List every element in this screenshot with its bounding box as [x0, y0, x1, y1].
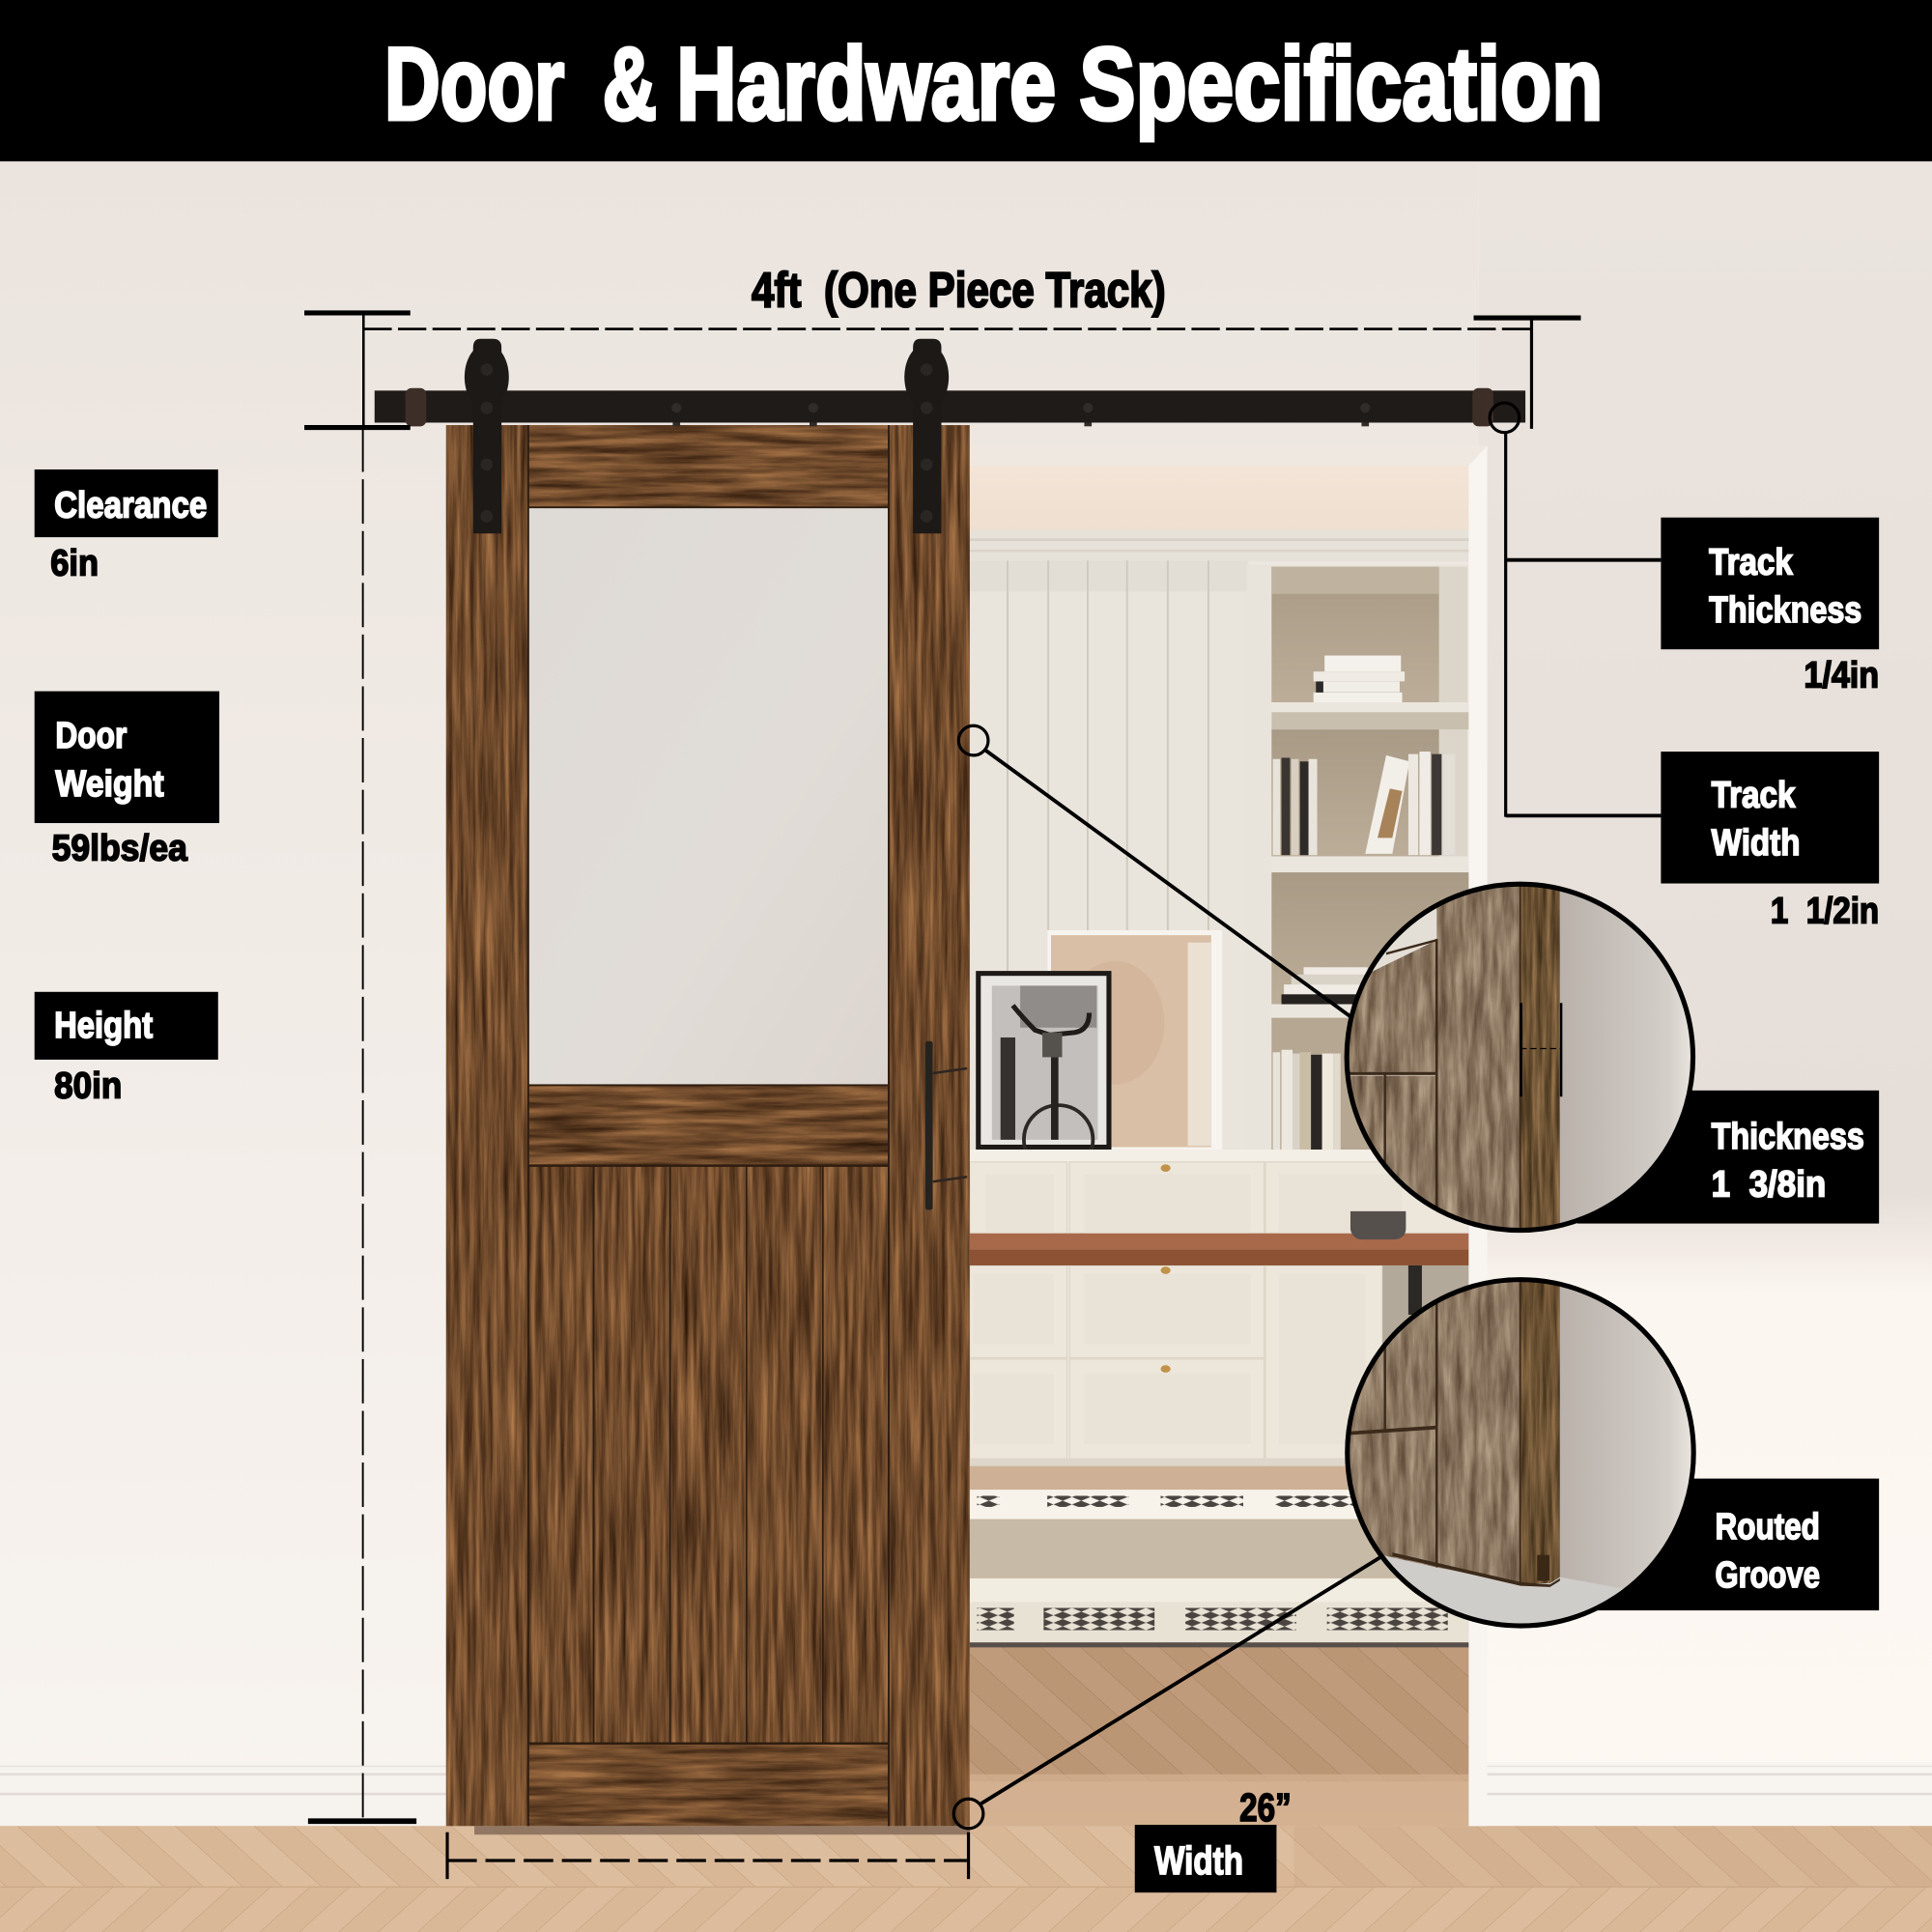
- callout: width: 26”: [1239, 1785, 1292, 1830]
- magnified detail: routed groove: [1343, 1275, 1700, 1633]
- barn door track and hangers: [375, 339, 1525, 533]
- callout: height: [35, 992, 218, 1106]
- cabinets: [970, 1150, 1468, 1467]
- title: [384, 26, 1603, 142]
- track length dimension line: [363, 318, 1580, 429]
- baseboards: [0, 1762, 1932, 1826]
- stiles: [446, 425, 970, 1826]
- door shadow on floor: [474, 1826, 970, 1834]
- upright books: [1273, 752, 1455, 855]
- callout: track thickness: [1661, 518, 1879, 696]
- callout: routed groove: Groove: [1716, 1554, 1820, 1596]
- callout: clearance: Clearance: [54, 485, 207, 526]
- desk top: [970, 1234, 1468, 1315]
- barn door: [446, 425, 970, 1826]
- left hanger: [465, 339, 509, 533]
- callout: door weight: Weight: [55, 763, 164, 805]
- room seen through the doorway: [970, 466, 1468, 1826]
- panelled back wall: [970, 560, 1248, 1158]
- ceiling glow: [970, 466, 1468, 532]
- width dimension line: [447, 1833, 969, 1879]
- bicycle photo: [976, 971, 1112, 1175]
- title: Specification: [1079, 26, 1603, 142]
- track bolts: [671, 403, 1370, 426]
- callout: routed groove: Routed: [1716, 1506, 1820, 1548]
- floor inside room: [970, 1466, 1468, 1826]
- beige art print: [1047, 930, 1222, 1150]
- title: &: [603, 26, 657, 142]
- right hanger: [904, 339, 949, 533]
- lying books: [1282, 967, 1368, 1005]
- callout: track width: 1 1/2in: [1771, 890, 1879, 931]
- callout: width: [1135, 1785, 1292, 1892]
- stacked books top shelf: [1314, 656, 1405, 702]
- wood floor: [0, 1826, 1932, 1932]
- rug: [970, 1490, 1468, 1647]
- routed groove notch: [1537, 1555, 1549, 1580]
- callout: clearance: [35, 469, 218, 584]
- callout: track thickness: Track: [1709, 541, 1793, 582]
- stoppers: [406, 388, 1493, 426]
- bookshelf: [1247, 564, 1468, 1158]
- plank panels: [528, 1166, 889, 1744]
- callout: track width: Width: [1712, 822, 1801, 864]
- title: Door: [384, 26, 564, 142]
- callout: clearance: 6in: [50, 543, 99, 584]
- callout: track thickness: Thickness: [1709, 589, 1861, 631]
- thickness marks: [1520, 1003, 1561, 1096]
- callout: door weight: Door: [55, 715, 127, 756]
- callout: door weight: 59lbs/ea: [52, 827, 188, 868]
- title: Hardware: [676, 26, 1056, 142]
- door frame jambs: [970, 446, 1488, 1826]
- track length label: 4ft (One Piece Track): [752, 263, 1166, 318]
- callout: height: Height: [54, 1005, 153, 1046]
- callout: width: Width: [1154, 1838, 1243, 1883]
- crown moulding: [970, 529, 1468, 562]
- rails: [528, 425, 889, 1826]
- callout: door thickness: 1 3/8in: [1712, 1164, 1826, 1206]
- glass panel: [528, 508, 889, 1084]
- groove lines: [527, 425, 890, 1826]
- header bar: [0, 0, 1932, 161]
- callout: door thickness: Thickness: [1712, 1116, 1864, 1157]
- callout: door thickness: [1577, 1091, 1879, 1224]
- routed groove leader: [953, 1553, 1386, 1829]
- callout: track width: [1661, 752, 1879, 931]
- callout: track thickness: 1/4in: [1804, 655, 1879, 696]
- height dimension line: [308, 428, 416, 1821]
- bowl on desk: [1350, 1211, 1406, 1239]
- callout: height: 80in: [54, 1065, 122, 1106]
- track detail leader: [1490, 403, 1661, 817]
- magnified detail: door edge thickness: [1343, 881, 1700, 1238]
- callout: door weight: [35, 692, 219, 868]
- door pull handle: [925, 1041, 967, 1210]
- callout: routed groove: [1589, 1479, 1879, 1610]
- lower books: [1273, 1050, 1341, 1152]
- thickness leader: [958, 725, 1355, 1020]
- clearance dimension line: [304, 313, 411, 428]
- callout: track width: Track: [1712, 774, 1796, 815]
